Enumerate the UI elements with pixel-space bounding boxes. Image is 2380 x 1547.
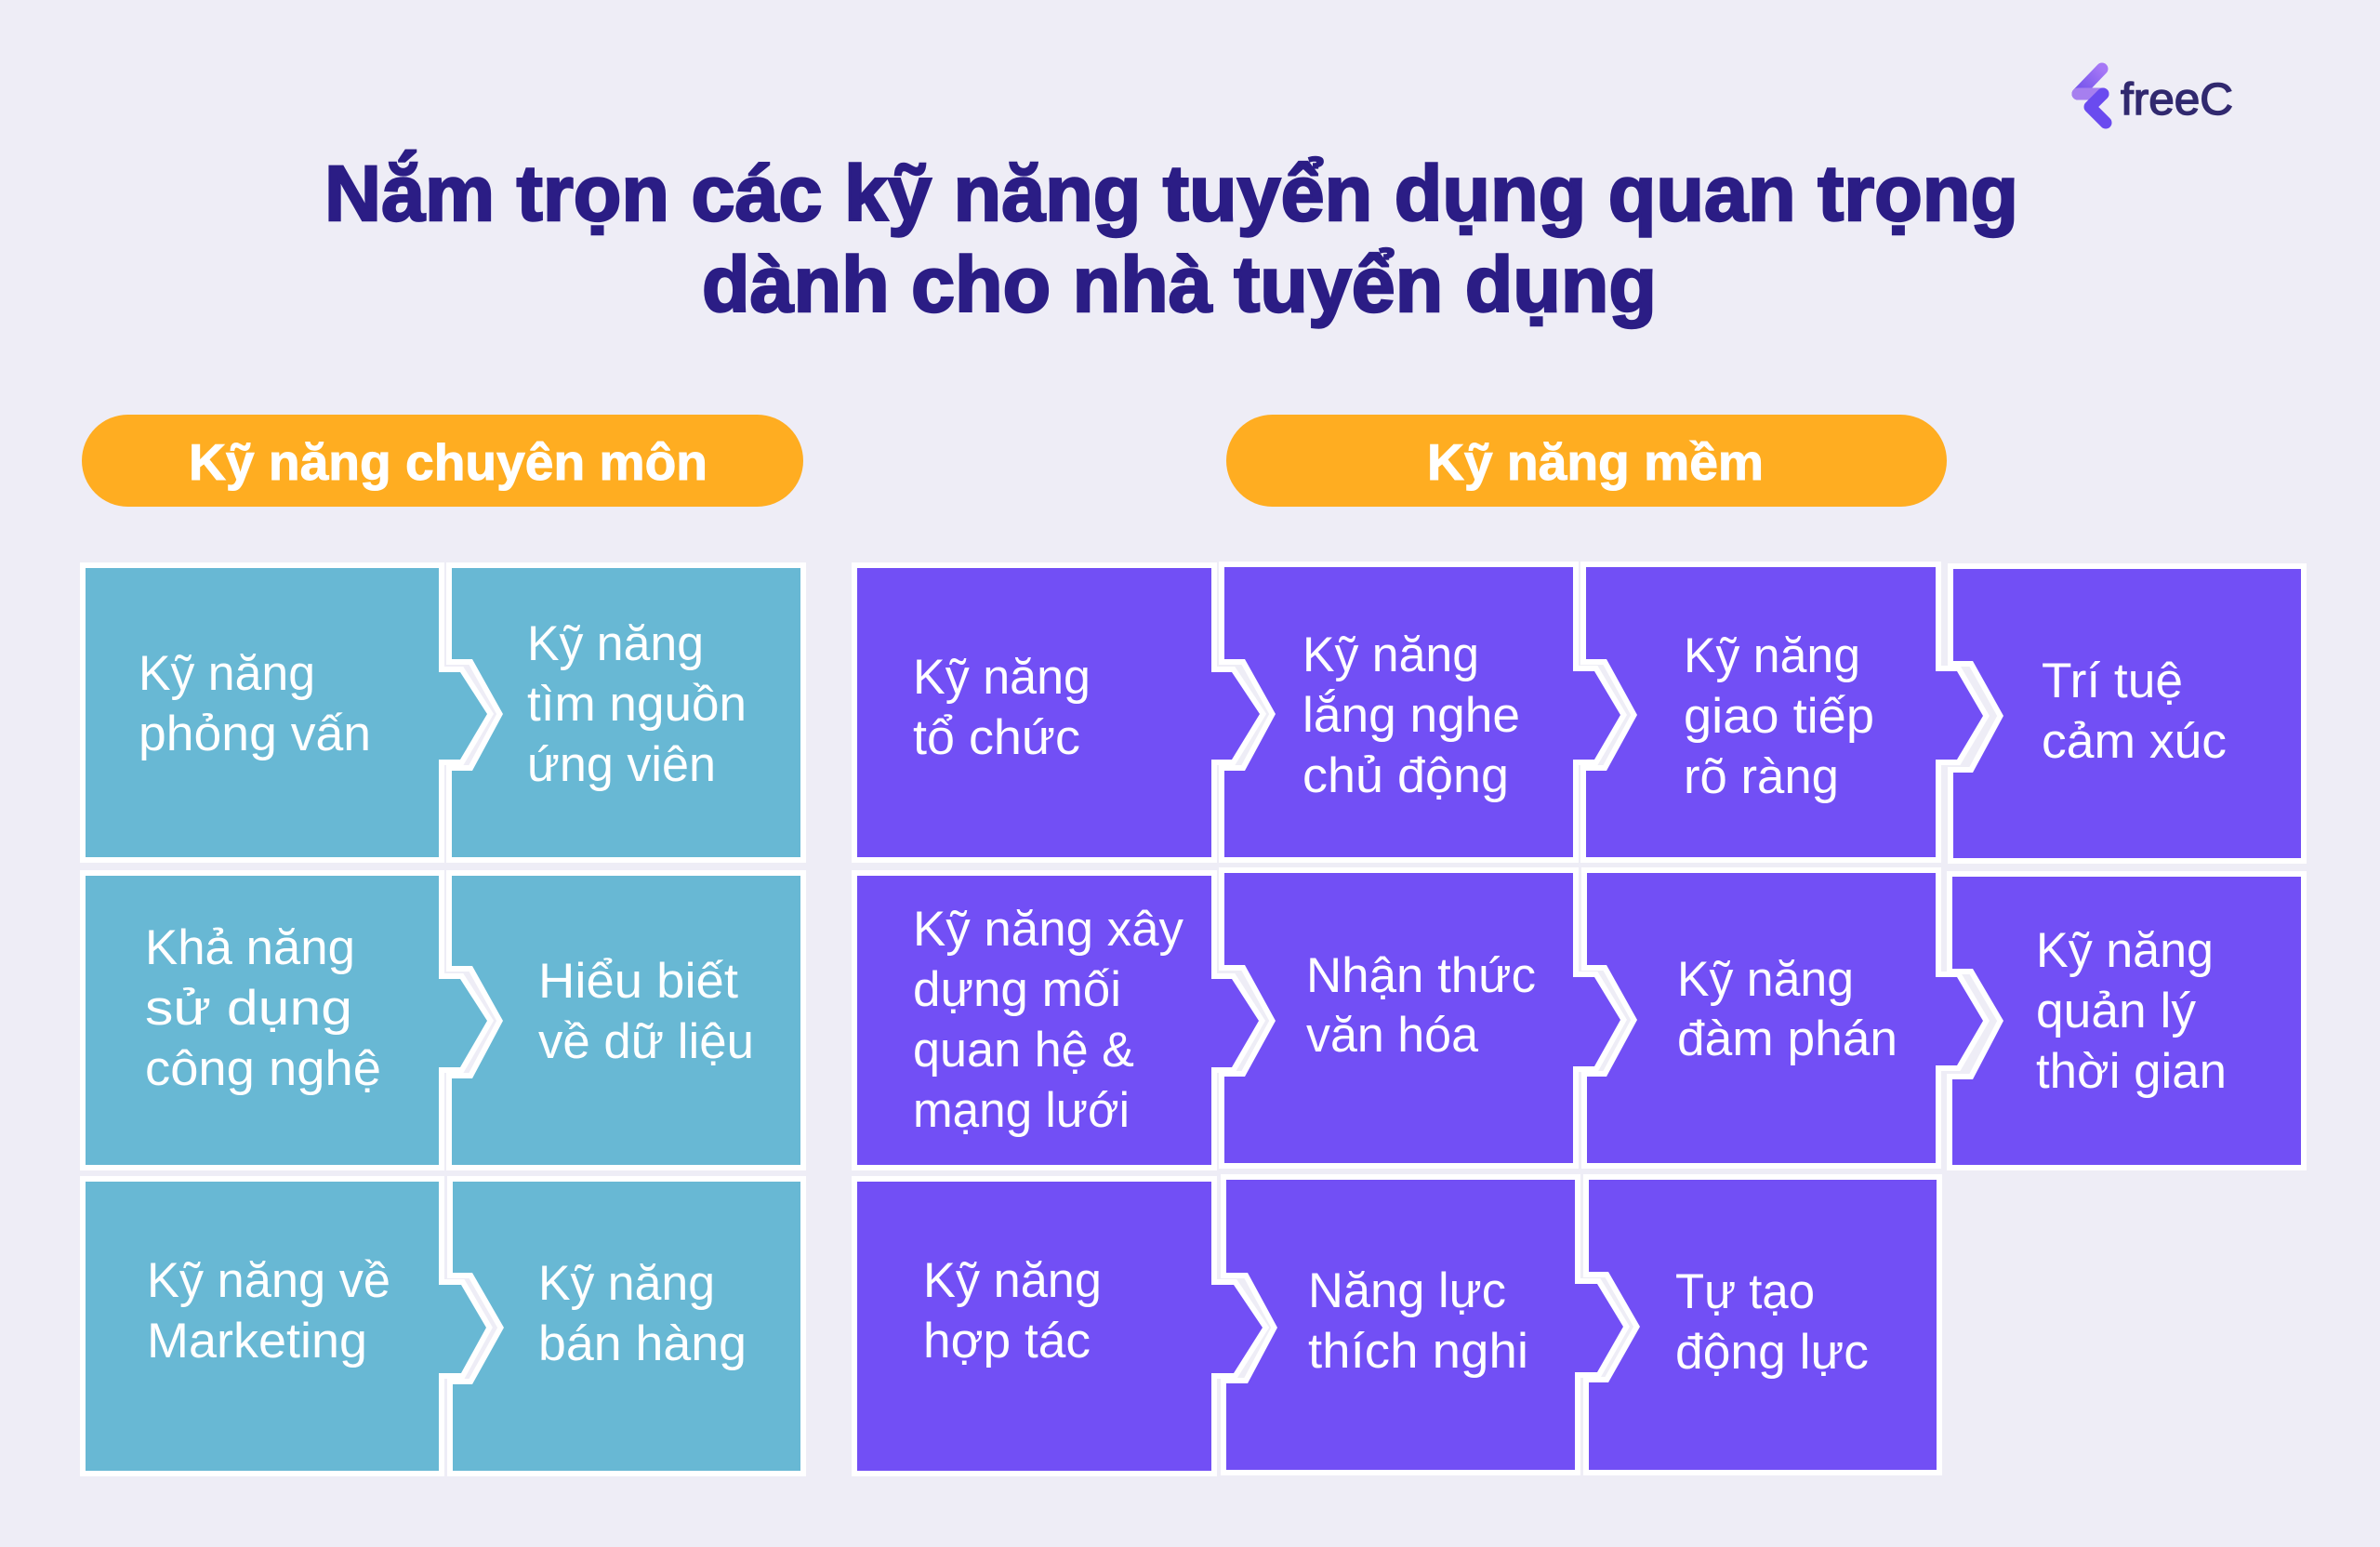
card: Kỹ năng về Marketing: Kỹ năng về [147, 1253, 390, 1308]
card: Tự tạo động lực [1589, 1180, 1937, 1470]
card: Khả năng sử dụng công nghệ: công nghệ [145, 1041, 381, 1096]
card: Kỹ năng quản lý thời gian [1952, 877, 2301, 1165]
card: Kỹ năng lắng nghe chủ động: chủ động [1302, 748, 1509, 803]
card: Kỹ năng tìm nguồn ứng viên [452, 568, 800, 857]
card: Kỹ năng xây dựng mối quan hệ & mạng lưới: quan hệ & [913, 1023, 1134, 1078]
card: Hiểu biết về dữ liệu: Hiểu biết [538, 954, 738, 1009]
icon: lightning mark [2078, 69, 2106, 123]
card: Kỹ năng phỏng vấn: Kỹ năng [139, 646, 315, 701]
card: Kỹ năng giao tiếp rõ ràng: Kỹ năng [1684, 628, 1860, 683]
title [324, 150, 2018, 328]
card: Năng lực thích nghi [1226, 1180, 1623, 1470]
heading pill: Kỹ năng chuyên môn [82, 415, 803, 507]
card: Kỹ năng xây dựng mối quan hệ & mạng lưới [857, 876, 1259, 1165]
card: Trí tuệ cảm xúc [1953, 569, 2301, 858]
card: Kỹ năng phỏng vấn: phỏng vấn [139, 707, 371, 761]
card: Kỹ năng tìm nguồn ứng viên: ứng viên [527, 737, 716, 792]
card: Tự tạo động lực: Tự tạo [1675, 1264, 1815, 1319]
card: Kỹ năng quản lý thời gian: Kỹ năng [2036, 923, 2214, 978]
card: Trí tuệ cảm xúc: Trí tuệ [2042, 654, 2183, 708]
card: Kỹ năng xây dựng mối quan hệ & mạng lưới: Kỹ năng xây [913, 902, 1183, 957]
card: Kỹ năng tổ chức [857, 568, 1260, 857]
card: Hiểu biết về dữ liệu [452, 876, 800, 1165]
logo wordmark: freeC [2121, 75, 2233, 125]
card: Kỹ năng quản lý thời gian: thời gian [2036, 1044, 2227, 1099]
card: Kỹ năng về Marketing [86, 1182, 486, 1471]
card: Hiểu biết về dữ liệu: về dữ liệu [538, 1014, 754, 1069]
card: Kỹ năng phỏng vấn [86, 568, 487, 857]
card: Kỹ năng đàm phán: Kỹ năng [1677, 952, 1854, 1007]
logo: freeC [2078, 69, 2233, 125]
heading pill: Kỹ năng mềm [1226, 415, 1947, 507]
card: Kỹ năng đàm phán [1587, 873, 1983, 1163]
card: Kỹ năng bán hàng: bán hàng [538, 1316, 747, 1371]
card: Năng lực thích nghi: Năng lực [1308, 1263, 1506, 1318]
card: Khả năng sử dụng công nghệ [86, 876, 487, 1165]
heading pill: Kỹ năng chuyên môn: Kỹ năng chuyên môn [189, 433, 707, 491]
card: Kỹ năng giao tiếp rõ ràng: rõ ràng [1684, 749, 1839, 804]
card: Kỹ năng lắng nghe chủ động [1224, 567, 1620, 857]
card: Kỹ năng giao tiếp rõ ràng: giao tiếp [1684, 689, 1874, 744]
panel: technical skills grid [86, 568, 800, 1471]
card: Kỹ năng hợp tác: Kỹ năng [923, 1253, 1102, 1308]
card: Kỹ năng lắng nghe chủ động: lắng nghe [1302, 688, 1520, 743]
card: Nhận thức văn hóa: Nhận thức [1306, 948, 1536, 1003]
card: Tự tạo động lực: động lực [1675, 1325, 1869, 1380]
card: Kỹ năng bán hàng [453, 1182, 800, 1471]
card: Kỹ năng lắng nghe chủ động: Kỹ năng [1302, 628, 1479, 682]
card: Nhận thức văn hóa: văn hóa [1306, 1008, 1479, 1063]
card: Kỹ năng quản lý thời gian: quản lý [2036, 984, 2197, 1038]
card: Kỹ năng về Marketing: Marketing [147, 1314, 367, 1368]
card: Năng lực thích nghi: thích nghi [1308, 1324, 1528, 1379]
title: dành cho nhà tuyển dụng [702, 241, 1657, 328]
card: Khả năng sử dụng công nghệ: sử dụng [145, 981, 352, 1036]
card: Kỹ năng hợp tác [857, 1182, 1263, 1471]
card: Kỹ năng tìm nguồn ứng viên: Kỹ năng [527, 616, 704, 671]
card: Kỹ năng giao tiếp rõ ràng [1586, 567, 1983, 857]
card: Kỹ năng xây dựng mối quan hệ & mạng lưới: mạng lưới [913, 1083, 1130, 1138]
card: Khả năng sử dụng công nghệ: Khả năng [145, 920, 355, 975]
card: Nhận thức văn hóa [1224, 873, 1620, 1163]
panel: soft skills grid [857, 567, 2301, 1471]
card: Kỹ năng tìm nguồn ứng viên: tìm nguồn [527, 677, 747, 732]
heading pill: Kỹ năng mềm: Kỹ năng mềm [1427, 433, 1764, 491]
card: Kỹ năng xây dựng mối quan hệ & mạng lưới: dựng mối [913, 962, 1121, 1017]
card: Trí tuệ cảm xúc: cảm xúc [2042, 714, 2227, 769]
card: Kỹ năng bán hàng: Kỹ năng [538, 1256, 715, 1311]
card: Kỹ năng hợp tác: hợp tác [923, 1314, 1091, 1368]
card: Kỹ năng đàm phán: đàm phán [1677, 1012, 1897, 1066]
card: Kỹ năng tổ chức: tổ chức [913, 710, 1080, 765]
title: Nắm trọn các kỹ năng tuyển dụng quan trọng [324, 150, 2018, 237]
card: Kỹ năng tổ chức: Kỹ năng [913, 650, 1091, 705]
